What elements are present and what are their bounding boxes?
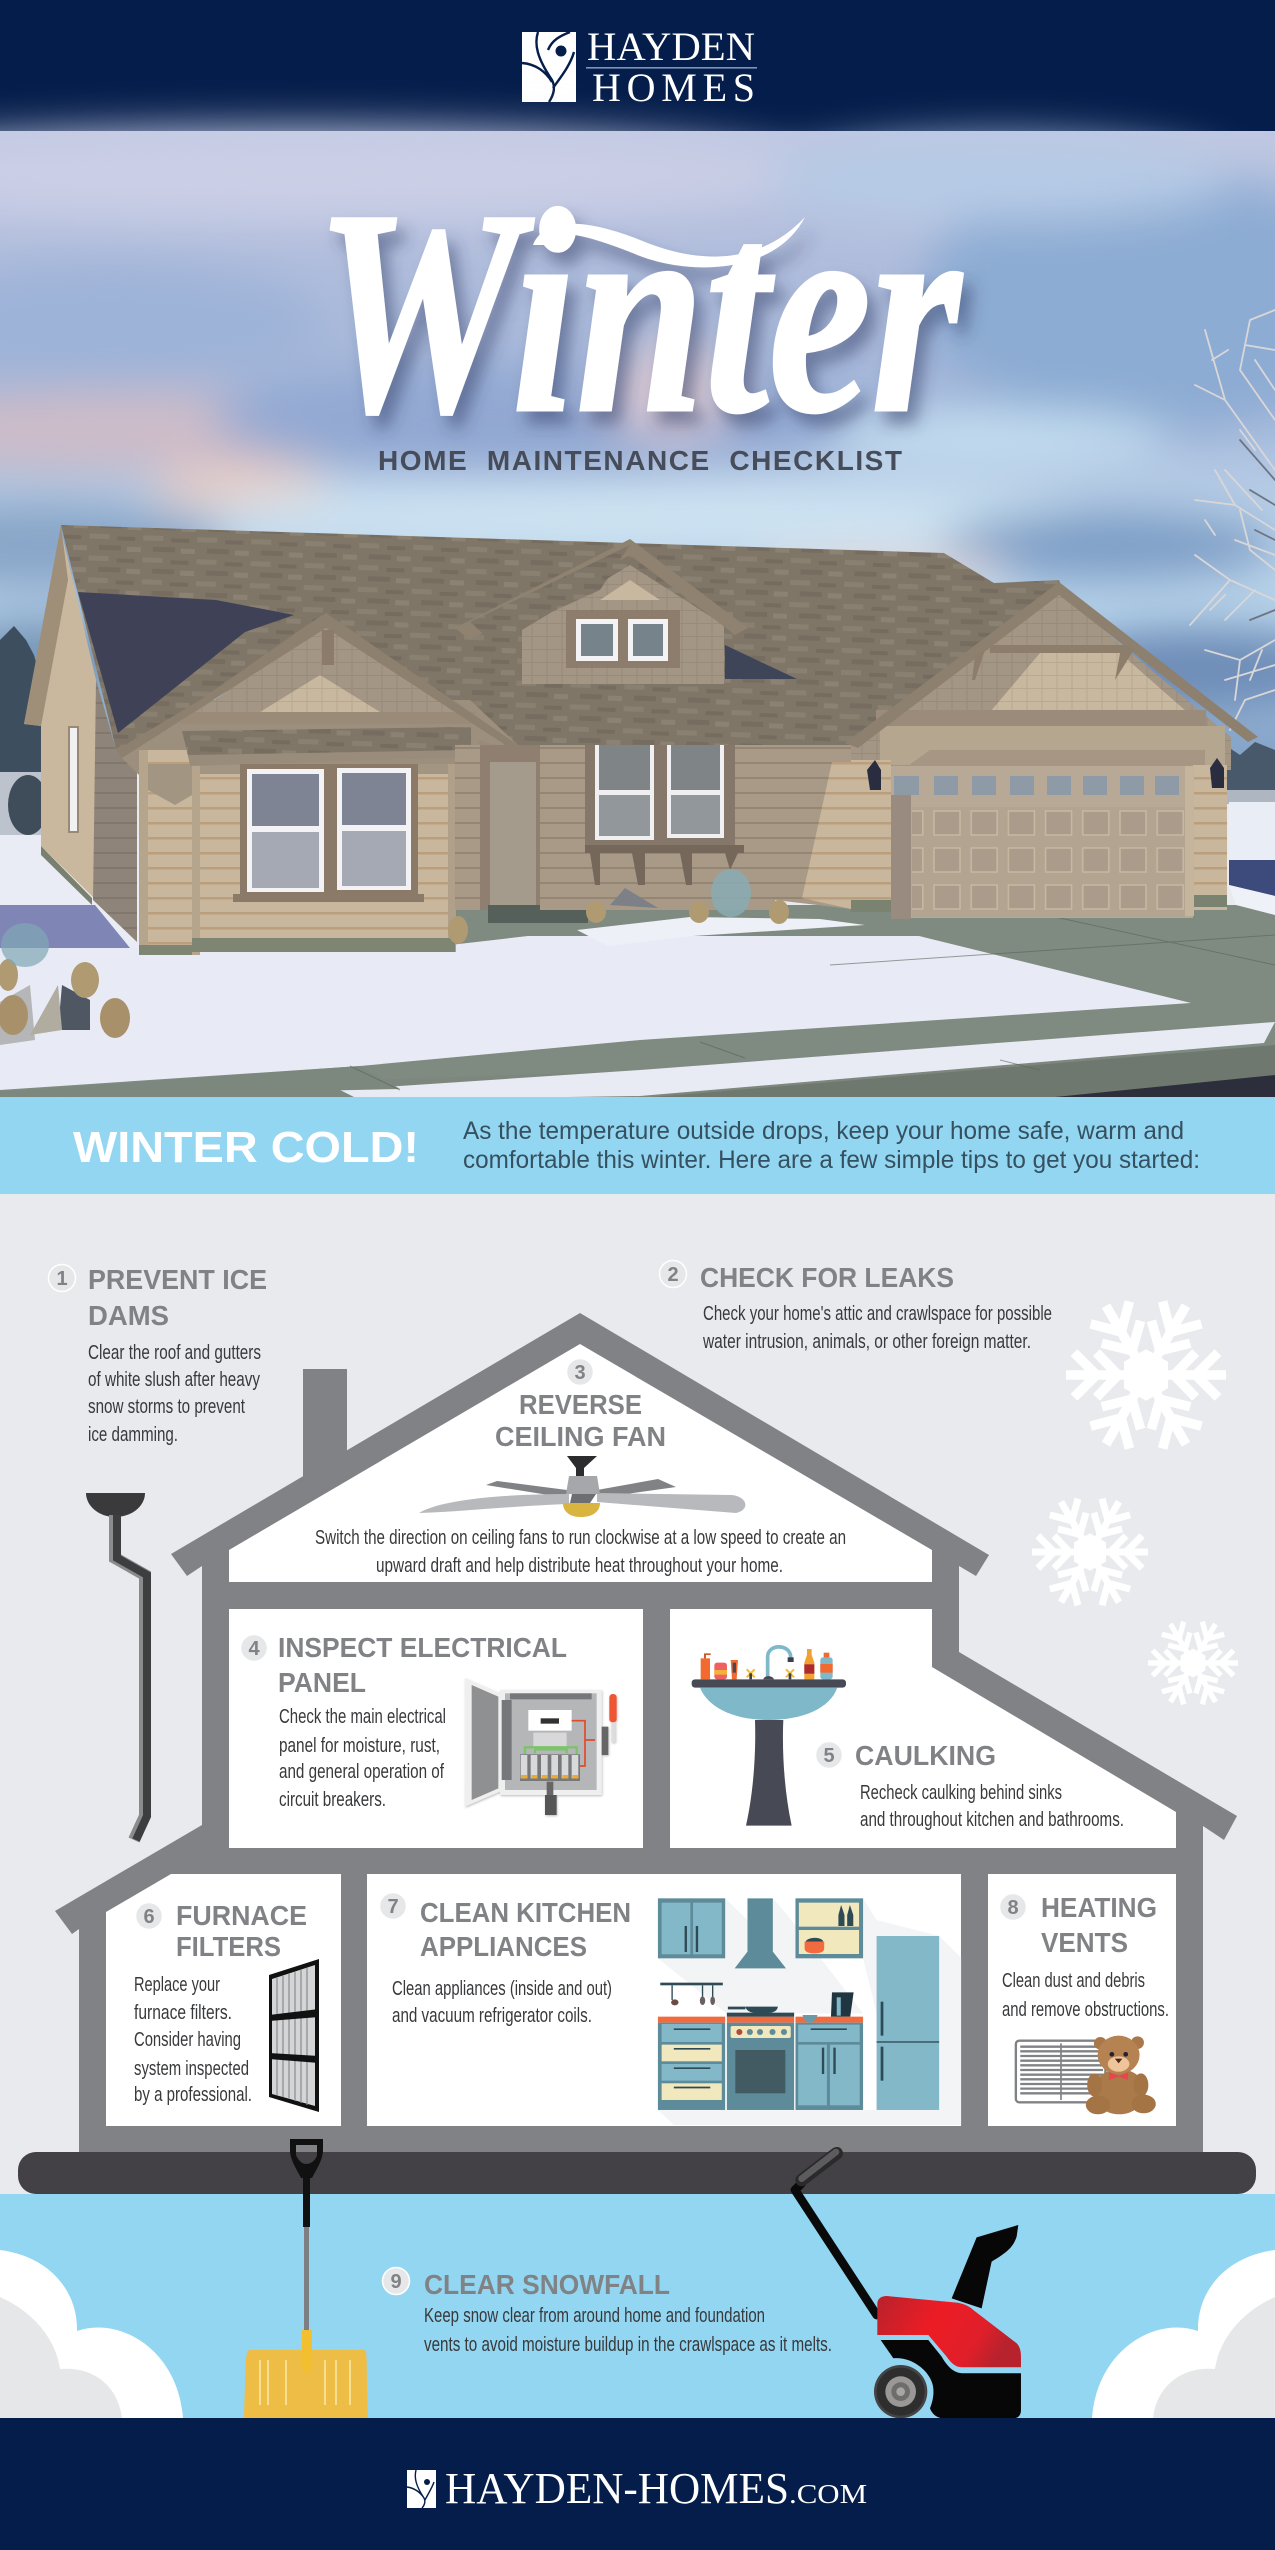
tip 2: check for leaks: Check your home's attic and crawlspace for possible [703, 1302, 1052, 1325]
tip 5: caulking: 5 [823, 1745, 835, 1767]
tip 3: reverse ceiling fan: CEILING FAN [495, 1421, 666, 1452]
tip 5: caulking: CAULKING [855, 1740, 996, 1771]
tip 5: caulking: and throughout kitchen and bathrooms. [860, 1808, 1124, 1831]
tip 5: caulking: Recheck caulking behind sinks [860, 1781, 1062, 1804]
subtitle: HOME MAINTENANCE CHECKLIST [378, 445, 902, 476]
tip 1: prevent ice dams: DAMS [88, 1300, 169, 1331]
tip 3: reverse ceiling fan: Switch the direction on ceiling fans to run clockwise at a low speed to create an [315, 1526, 846, 1549]
tip 5: caulking [692, 1647, 1124, 1831]
left snow drift [0, 2250, 183, 2418]
room: vents [988, 1874, 1176, 2126]
hero: bare tree at right [1190, 310, 1275, 730]
center wall and windows [540, 745, 775, 910]
banner intro text: comfortable this winter. Here are a few simple tips to get you started: [463, 1146, 1200, 1174]
hero: distant trees and field [0, 626, 1275, 835]
tip 3: reverse ceiling fan: REVERSE [519, 1389, 642, 1420]
tip 6: furnace filters: by a professional. [134, 2083, 252, 2106]
tip 4: inspect electrical panel: Check the main electrical [279, 1705, 446, 1728]
logo: Hayden Homes: HOMES [592, 65, 755, 110]
header band with logo [0, 0, 1275, 131]
roof shadow patch [78, 592, 294, 733]
tip 1: prevent ice dams: Clear the roof and gutters [88, 1341, 261, 1364]
garage door [891, 766, 1194, 919]
room: furnace [106, 1874, 341, 2126]
front gable [116, 613, 518, 768]
tip 7: clean kitchen appliances: Clean appliances (inside and out) [392, 1977, 612, 2000]
icon: pedestal sink [692, 1647, 846, 1826]
icon: vent with teddy bear [1016, 2036, 1156, 2114]
tip 7: clean kitchen appliances: 7 [387, 1896, 399, 1918]
room: electrical [229, 1609, 643, 1848]
side gable wall [24, 530, 96, 900]
room: kitchen [367, 1874, 961, 2126]
tip 8: heating vents: VENTS [1041, 1927, 1128, 1958]
icon: ceiling fan [419, 1456, 745, 1517]
tip 7: clean kitchen appliances: CLEAN KITCHEN [420, 1897, 631, 1928]
tip 4: inspect electrical panel [240, 1632, 617, 1815]
tip 7: clean kitchen appliances: and vacuum refrigerator coils. [392, 2004, 592, 2027]
tip 9: clear snowfall [382, 2268, 832, 2356]
ground band with snow drifts [0, 2194, 1275, 2418]
tip 6: furnace filters: system inspected [134, 2057, 249, 2080]
tip 7: clean kitchen appliances [380, 1892, 961, 2125]
icon: gutter and downspout [86, 1493, 147, 1840]
tip 4: inspect electrical panel: and general operation of [279, 1760, 444, 1783]
tip 6: furnace filters [134, 1900, 319, 2112]
tip 8: heating vents [1000, 1892, 1169, 2114]
banner intro text: As the temperature outside drops, keep your home safe, warm and [463, 1117, 1184, 1145]
main roof [61, 525, 1070, 749]
tip 9: clear snowfall: CLEAR SNOWFALL [424, 2269, 670, 2300]
logo: Hayden Homes: HAYDEN [587, 24, 755, 69]
snowflake medium [1032, 1494, 1148, 1610]
tip 2: check for leaks: water intrusion, animals, or other foreign matter. [702, 1330, 1031, 1353]
banner heading: WINTER COLD! [73, 1123, 419, 1172]
right snow drift [1092, 2250, 1275, 2418]
garage wall [851, 760, 891, 912]
tip 1: prevent ice dams: ice damming. [88, 1423, 178, 1446]
white sidewalk strip [340, 1022, 1275, 1100]
icon: furnace filter [269, 1959, 319, 2112]
house cross-section [55, 1313, 1237, 2156]
tip 8: heating vents: 8 [1007, 1897, 1019, 1919]
dormer [455, 539, 797, 684]
tip 2: check for leaks: 2 [667, 1264, 679, 1286]
tip 8: heating vents: HEATING [1041, 1892, 1157, 1923]
tip 3: reverse ceiling fan: 3 [574, 1362, 586, 1384]
tip 9: clear snowfall: 9 [390, 2271, 402, 2293]
tip 1: prevent ice dams: 1 [56, 1268, 68, 1290]
icon: snow shovel [244, 2139, 368, 2418]
right gable wall [851, 592, 1231, 770]
tip 6: furnace filters: furnace filters. [134, 2001, 232, 2024]
tip 4: inspect electrical panel: 4 [248, 1638, 260, 1660]
icon: electrical panel [465, 1678, 617, 1815]
porch wall and door [455, 745, 640, 910]
foundation bar [18, 2152, 1256, 2194]
hero: landscaping shrubs and rock [0, 869, 789, 1045]
tip 3: reverse ceiling fan: upward draft and help distribute heat throughout your home. [376, 1554, 783, 1577]
tip 2: check for leaks: CHECK FOR LEAKS [700, 1262, 954, 1293]
footer band with logo [0, 2418, 1275, 2550]
snow patch at front walk [577, 917, 865, 946]
hero: the house [24, 525, 1258, 955]
wall fill under gable eaves [122, 700, 518, 775]
hero: ground, lawn, driveway and sidewalk [0, 802, 1275, 1100]
snowflake large [1066, 1295, 1226, 1455]
tip 1: prevent ice dams: of white slush after heavy [88, 1368, 261, 1391]
tip 6: furnace filters: FILTERS [176, 1931, 281, 1962]
front walls and bay [139, 750, 192, 955]
tip 4: inspect electrical panel: circuit breakers. [279, 1788, 386, 1811]
footer website: HAYDEN-HOMES [445, 2464, 789, 2513]
bay roof [182, 727, 471, 764]
tip 4: inspect electrical panel: panel for moisture, rust, [279, 1734, 440, 1757]
room: bathroom [670, 1609, 1176, 1848]
snowflake small [1148, 1618, 1238, 1708]
bay windows [233, 764, 424, 902]
title swash [533, 217, 805, 267]
tip 1: prevent ice dams [48, 1264, 267, 1446]
footer band with logo: .COM [789, 2479, 867, 2509]
winter cold banner [0, 1097, 1275, 1194]
tip 1: prevent ice dams: snow storms to prevent [88, 1395, 245, 1418]
tip 7: clean kitchen appliances: APPLIANCES [420, 1931, 587, 1962]
lawn with snow [0, 925, 1191, 1090]
tip 4: inspect electrical panel: INSPECT ELECTRICAL [278, 1632, 567, 1663]
Winter script title: Winter [315, 151, 965, 474]
tip 4: inspect electrical panel: PANEL [278, 1667, 366, 1698]
tip 6: furnace filters: Replace your [134, 1973, 220, 1996]
tip 6: furnace filters: FURNACE [176, 1900, 307, 1931]
tip 1: prevent ice dams: PREVENT ICE [88, 1264, 267, 1295]
tip 2: check for leaks [660, 1260, 1052, 1353]
banner intro text [463, 1117, 1200, 1174]
tip 3: reverse ceiling fan [315, 1358, 846, 1577]
tip 6: furnace filters: 6 [143, 1906, 155, 1928]
hero photo: sky [0, 130, 1275, 771]
right gable roof trim [845, 582, 1258, 748]
wall lamps [867, 758, 1224, 790]
tip 9: clear snowfall: vents to avoid moisture buildup in the crawlspace as it melts. [424, 2333, 832, 2356]
tip 6: furnace filters: Consider having [134, 2028, 241, 2051]
logo: Hayden Homes [522, 24, 757, 110]
tip 8: heating vents: and remove obstructions. [1002, 1998, 1169, 2021]
tip 8: heating vents: Clean dust and debris [1002, 1969, 1145, 1992]
icon: snow blower [795, 2152, 1021, 2418]
tip 9: clear snowfall: Keep snow clear from around home and foundation [424, 2304, 765, 2327]
icon: kitchen [658, 1898, 961, 2125]
room: attic [229, 1344, 932, 1582]
shaded side wall [93, 680, 137, 942]
